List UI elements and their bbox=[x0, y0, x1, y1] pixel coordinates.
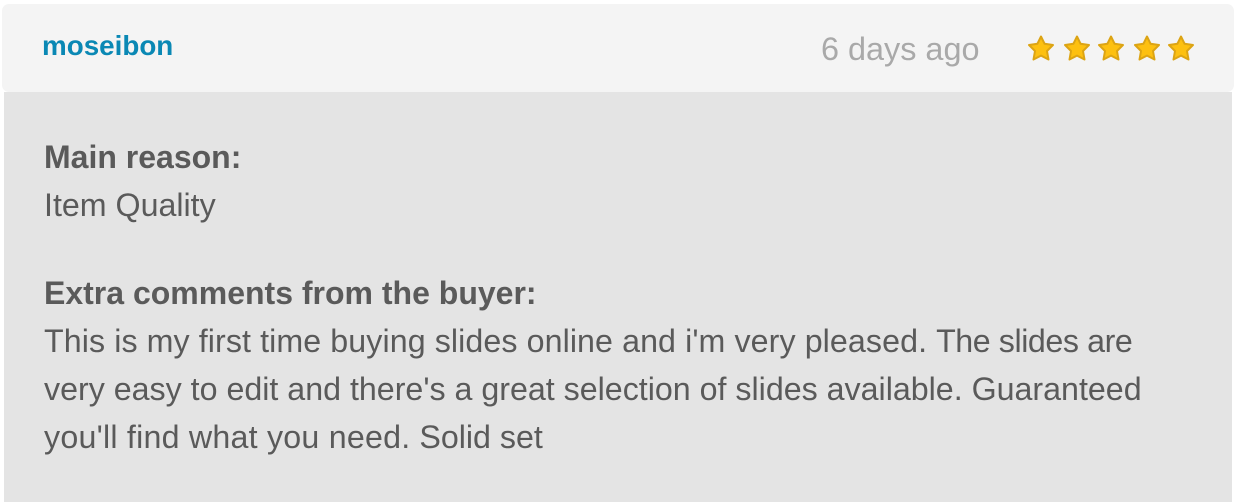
heading: main reason: Main reason: bbox=[44, 139, 241, 175]
text: buyer comment: very easy to edit and there's a great selection of slides available. Guaranteed bbox=[44, 371, 1142, 407]
text: buyer comment: This is my first time buying slides online and i'm very pleased. The slides are bbox=[44, 323, 1132, 359]
text: main reason value: Item Quality bbox=[44, 187, 216, 223]
text: buyer comment bbox=[44, 323, 1142, 455]
panel: review header bbox=[2, 4, 1234, 92]
text: buyer comment: you'll find what you need. Solid set bbox=[44, 419, 543, 455]
heading: extra comments: Extra comments from the buyer: bbox=[44, 275, 537, 311]
timestamp: 6 days ago bbox=[821, 31, 979, 67]
icon: five star rating bbox=[1028, 36, 1194, 60]
username: moseibon bbox=[42, 30, 173, 61]
